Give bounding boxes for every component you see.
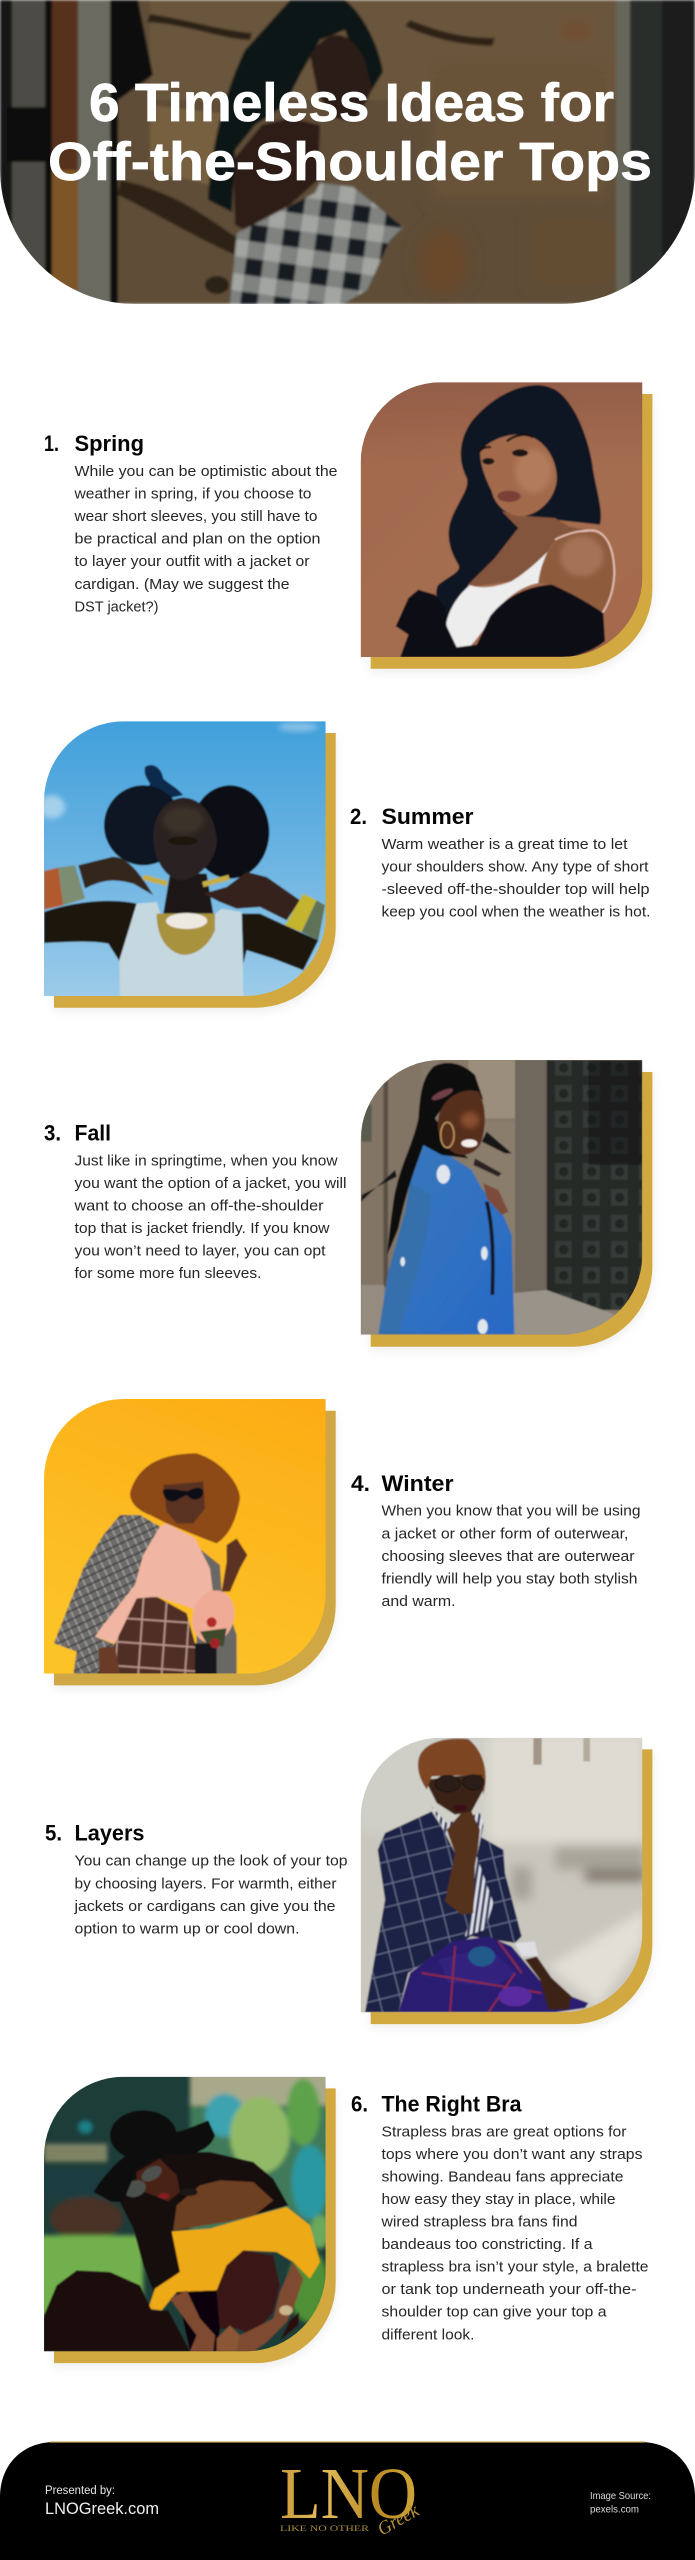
- gold backing shape 2: [54, 733, 336, 1008]
- text: Fall body: Just like in springtime, when you know: [74, 1152, 338, 1169]
- footer: [0, 2442, 695, 2560]
- text: Winter body: a jacket or other form of outerwear,: [382, 1525, 628, 1542]
- photo: woman on yellow background: [44, 1399, 326, 1674]
- heading: Layers: Layers: [74, 1821, 144, 1846]
- presented by: Presented by:: [45, 2485, 115, 2497]
- text: The Right Bra body: showing. Bandeau fans appreciate: [382, 2168, 624, 2185]
- text: Layers body: jackets or cardigans can give you the: [73, 1898, 336, 1915]
- section 4: Winter: [40, 1395, 640, 1685]
- text: The Right Bra body: different look.: [382, 2326, 474, 2343]
- text: Spring body: to layer your outfit with a jacket or: [74, 553, 310, 570]
- text: The Right Bra body: tops where you don’t want any straps: [382, 2146, 642, 2163]
- heading: Fall: 3.: [44, 1121, 61, 1146]
- title: Off-the-Shoulder Tops: [48, 132, 652, 192]
- text: Spring body: wear short sleeves, you still have to: [73, 508, 318, 525]
- gold backing shape 3: [371, 1072, 652, 1347]
- text: Summer body: your shoulders show. Any type of short: [382, 859, 649, 876]
- gold backing shape 5: [371, 1749, 652, 2024]
- header photo: [0, 0, 695, 304]
- heading: Spring: [44, 431, 144, 456]
- text: Fall body: [73, 1152, 346, 1282]
- text: Spring body: While you can be optimistic about the: [74, 463, 338, 480]
- photo: woman in plaid blazer: [360, 1738, 642, 2012]
- text: Layers body: option to warm up or cool down.: [74, 1920, 300, 1937]
- text: Summer body: keep you cool when the weather is hot.: [382, 904, 650, 921]
- text: Winter body: choosing sleeves that are outerwear: [382, 1548, 634, 1565]
- text: Winter body: When you know that you will be using: [382, 1503, 640, 1520]
- heading: Spring: Spring: [74, 431, 144, 456]
- text: Fall body: top that is jacket friendly. If you know: [74, 1220, 330, 1237]
- heading: Spring: 1.: [44, 431, 59, 456]
- heading: The Right Bra: The Right Bra: [382, 2092, 522, 2117]
- heading: The Right Bra: 6.: [351, 2092, 368, 2117]
- photo: woman in denim jacket: [360, 1060, 642, 1335]
- text: Winter body: [382, 1503, 640, 1610]
- image source: [590, 2490, 651, 2516]
- photo: woman in hat and yellow top: [44, 2076, 326, 2352]
- gold backing shape 4: [54, 1411, 336, 1685]
- text: Layers body: by choosing layers. For warmth, either: [74, 1875, 336, 1892]
- text: The Right Bra body: wired strapless bra fans find: [380, 2214, 578, 2230]
- text: Layers body: [73, 1853, 348, 1937]
- text: Spring body: weather in spring, if you choose to: [73, 486, 311, 503]
- section 6: The Right Bra: [40, 2072, 648, 2363]
- gold backing shape 1: [371, 394, 652, 669]
- heading: Layers: 5.: [45, 1821, 62, 1846]
- gold backing shape 6: [54, 2088, 336, 2363]
- photo: woman on brown background: [360, 382, 642, 657]
- text: Layers body: You can change up the look of your top: [74, 1853, 348, 1870]
- section 1: Spring: [44, 378, 655, 669]
- text: The Right Bra body: shoulder top can give your top a: [382, 2304, 607, 2321]
- heading: Fall: [44, 1121, 111, 1146]
- text: Fall body: for some more fun sleeves.: [74, 1265, 262, 1282]
- text: The Right Bra body: [380, 2123, 648, 2343]
- image source: Image Source:: [590, 2490, 651, 2502]
- section 2: Summer: [38, 717, 650, 1008]
- footer bar: [0, 2442, 695, 2560]
- text: Summer body: [382, 836, 650, 921]
- text: Summer body: Warm weather is a great time to let: [382, 836, 628, 853]
- text: The Right Bra body: Strapless bras are great options for: [382, 2123, 626, 2140]
- text: The Right Bra body: bandeaus too constricting. If a: [382, 2236, 593, 2253]
- heading: Winter: [351, 1471, 454, 1496]
- logo: LNO Like No Other Greek: Greek: [374, 2500, 423, 2540]
- image source: pexels.com: [590, 2504, 639, 2516]
- footer gold rule: [50, 2442, 645, 2443]
- text: Spring body: be practical and plan on the option: [74, 531, 320, 548]
- title: [48, 73, 652, 192]
- header banner: [0, 0, 695, 304]
- text: The Right Bra body: strapless bra isn’t your style, a bralette: [382, 2259, 648, 2276]
- section 3: Fall: [44, 1055, 655, 1347]
- text: Fall body: want to choose an off-the-shoulder: [73, 1197, 324, 1214]
- heading: Winter: 4.: [351, 1471, 370, 1496]
- heading: Winter: Winter: [382, 1471, 454, 1496]
- text: Spring body: DST jacket?): [74, 598, 159, 615]
- logo: LNO Like No Other Greek: LIKE NO OTHER: [280, 2523, 369, 2533]
- heading: Fall: Fall: [74, 1121, 111, 1146]
- text: Spring body: [73, 463, 337, 615]
- photo: woman with afro against blue sky: [44, 721, 326, 996]
- title: 6 Timeless Ideas for: [89, 73, 614, 133]
- heading: Layers: [45, 1821, 144, 1846]
- text: The Right Bra body: how easy they stay in place, while: [382, 2191, 616, 2208]
- text: Fall body: you want the option of a jacket, you will: [74, 1175, 346, 1192]
- logo: LNO Like No Other Greek: LNO: [280, 2453, 417, 2534]
- presented by: [45, 2485, 159, 2518]
- text: Winter body: and warm.: [382, 1593, 456, 1610]
- heading: Summer: Summer: [382, 804, 474, 829]
- presented by: LNOGreek.com: [45, 2499, 159, 2518]
- text: Winter body: friendly will help you stay both stylish: [382, 1570, 638, 1587]
- section 5: Layers: [45, 1733, 655, 2024]
- text: Summer body: -sleeved off-the-shoulder top will help: [382, 881, 650, 898]
- text: The Right Bra body: or tank top underneath your off-the-: [382, 2281, 636, 2298]
- heading: Summer: 2.: [350, 804, 367, 829]
- text: Spring body: cardigan. (May we suggest the: [74, 576, 290, 593]
- text: Fall body: you won’t need to layer, you can opt: [74, 1242, 326, 1260]
